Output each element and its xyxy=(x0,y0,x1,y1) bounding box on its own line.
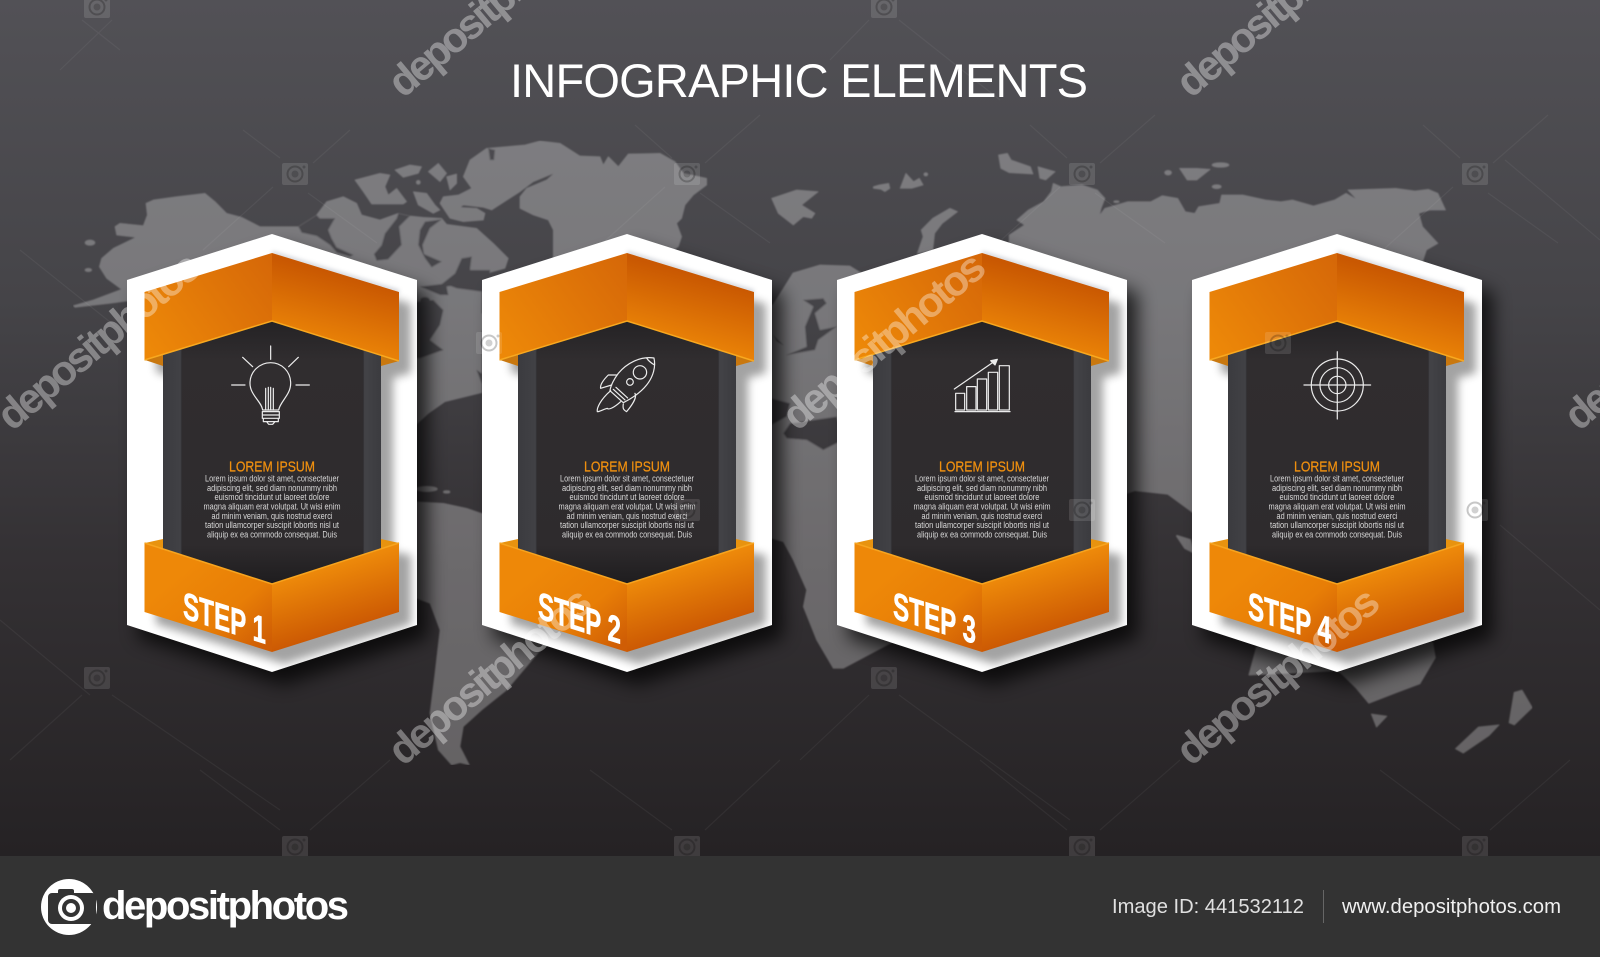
body text: magna aliquam erat volutpat. Ut wisi enim xyxy=(1268,502,1406,512)
body text: tation ullamcorper suscipit lobortis nisl ut xyxy=(560,520,694,530)
body text: adipiscing elit, sed diam nonummy nibh xyxy=(917,483,1047,493)
bottom orange band xyxy=(854,543,1109,652)
heading: LOREM IPSUM xyxy=(939,458,1025,476)
step label: STEP 3 xyxy=(893,585,976,653)
body text: Lorem ipsum dolor sit amet, consectetuer xyxy=(560,474,694,484)
body text: aliquip ex ea commodo consequat. Duis xyxy=(917,530,1047,540)
body text: euismod tincidunt ut laoreet dolore xyxy=(214,492,330,502)
body text: tation ullamcorper suscipit lobortis nisl ut xyxy=(915,520,1049,530)
watermark cameras over cards xyxy=(476,332,1488,521)
diagonal depositphotos watermarks: depositphotos xyxy=(773,242,994,439)
body text: Lorem ipsum dolor sit amet, consectetuer xyxy=(915,474,1049,484)
body text: ad minim veniam, quis nostrud exerci xyxy=(922,511,1043,521)
bottom orange band xyxy=(500,543,754,652)
body text: adipiscing elit, sed diam nonummy nibh xyxy=(562,483,692,493)
world map xyxy=(73,140,1532,765)
diagonal depositphotos watermarks: depositphotos xyxy=(379,577,600,774)
step label: STEP 4 xyxy=(1248,585,1331,653)
step label: STEP 2 xyxy=(538,585,621,653)
body text xyxy=(204,474,340,540)
heading: LOREM IPSUM xyxy=(1294,458,1380,476)
body text: aliquip ex ea commodo consequat. Duis xyxy=(1272,530,1402,540)
body text: euismod tincidunt ut laoreet dolore xyxy=(924,492,1040,502)
body text: tation ullamcorper suscipit lobortis nisl ut xyxy=(1270,520,1404,530)
body text: ad minim veniam, quis nostrud exerci xyxy=(1276,511,1398,521)
panel: step 3 xyxy=(837,234,1138,685)
panel: step 2 xyxy=(482,234,783,685)
body text: adipiscing elit, sed diam nonummy nibh xyxy=(207,483,337,493)
diagonal depositphotos watermarks: depositphotos xyxy=(1167,577,1388,774)
icon: footer camera logo xyxy=(41,879,97,935)
body text: magna aliquam erat volutpat. Ut wisi enim xyxy=(558,502,696,512)
bottom orange band xyxy=(144,543,399,652)
body text: tation ullamcorper suscipit lobortis nisl ut xyxy=(205,520,339,530)
heading: LOREM IPSUM xyxy=(229,458,315,476)
body text: euismod tincidunt ut laoreet dolore xyxy=(570,492,685,502)
footer brand name: depositphotos xyxy=(102,884,349,928)
body text xyxy=(914,474,1050,540)
body text: aliquip ex ea commodo consequat. Duis xyxy=(562,530,692,540)
icon: growth chart xyxy=(954,359,1010,412)
website url: www.depositphotos.com xyxy=(1341,896,1561,918)
body text: ad minim veniam, quis nostrud exerci xyxy=(212,511,333,521)
icon: target xyxy=(1304,352,1371,419)
body text: Lorem ipsum dolor sit amet, consectetuer xyxy=(1270,474,1404,484)
icon: light bulb xyxy=(232,346,309,424)
top orange band xyxy=(500,253,754,361)
panel: step 1 xyxy=(127,234,428,685)
icon: rocket xyxy=(597,358,655,412)
step label: STEP 1 xyxy=(183,585,266,653)
bottom orange band xyxy=(1210,543,1464,652)
body text: adipiscing elit, sed diam nonummy nibh xyxy=(1272,483,1402,493)
body text: magna aliquam erat volutpat. Ut wisi enim xyxy=(204,502,340,512)
body text: Lorem ipsum dolor sit amet, consectetuer xyxy=(205,474,339,484)
body text: magna aliquam erat volutpat. Ut wisi enim xyxy=(914,502,1050,512)
image id: Image ID: 441532112 xyxy=(1112,896,1304,918)
body text: euismod tincidunt ut laoreet dolore xyxy=(1280,492,1395,502)
top orange band xyxy=(144,253,399,361)
body text xyxy=(1268,474,1406,540)
body text: aliquip ex ea commodo consequat. Duis xyxy=(207,530,337,540)
heading: LOREM IPSUM xyxy=(584,458,670,476)
top orange band xyxy=(1210,253,1464,361)
top orange band xyxy=(854,253,1109,361)
panel: step 4 xyxy=(1192,234,1493,685)
title: INFOGRAPHIC ELEMENTS xyxy=(510,54,1088,107)
body text: ad minim veniam, quis nostrud exerci xyxy=(566,511,688,521)
body text xyxy=(558,474,696,540)
footer bar xyxy=(0,856,1600,957)
